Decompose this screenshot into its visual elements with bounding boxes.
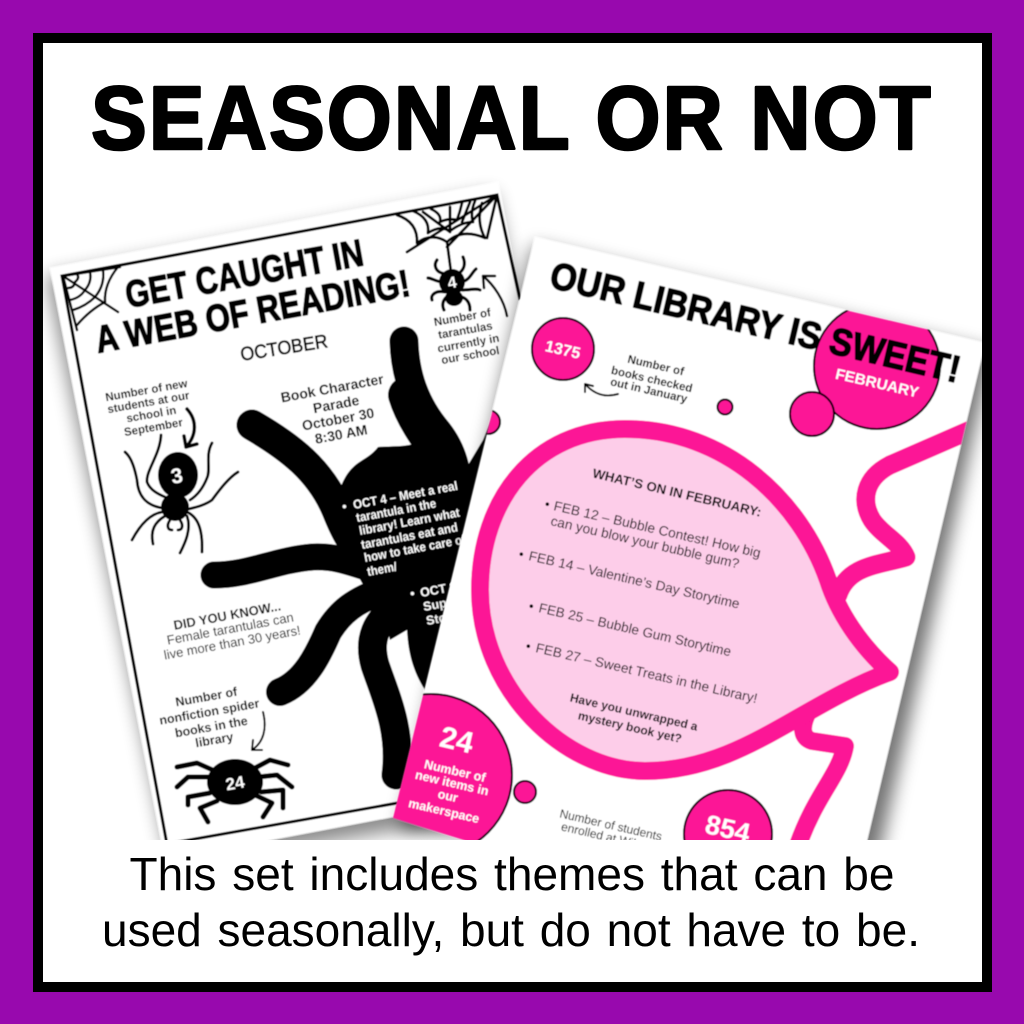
- poster border: [62, 195, 520, 850]
- event: character parade: 8:30 AM: [313, 421, 369, 447]
- nonfiction books caption: books in the: [174, 714, 249, 740]
- caption: This set includes themes that can be: [130, 848, 894, 900]
- icon: giant tarantula silhouette: [214, 341, 540, 775]
- poster sheet: [393, 237, 985, 845]
- tarantula count caption: Number of: [433, 307, 492, 329]
- poster bottom border: [176, 801, 398, 840]
- white event list on spider: OCT 18 –: [419, 576, 475, 600]
- stat 24 makerspace: [407, 721, 490, 826]
- white event list on spider: [342, 480, 463, 626]
- icon: corner web right: [397, 195, 497, 272]
- new students caption: Number of new: [105, 378, 188, 404]
- white event list on spider: how to take care of: [363, 532, 468, 565]
- nonfiction books caption: nonfiction spider: [158, 696, 261, 728]
- left edge bubble: [486, 410, 502, 436]
- poster heading: OUR LIBRARY IS SWEET!: [546, 255, 964, 392]
- bubble event list: •: [517, 546, 526, 562]
- arrow to 1375: [585, 384, 618, 396]
- bubble event list: FEB 27 – Sweet Treats in the Library!: [534, 640, 759, 706]
- white event list on spider: •: [341, 499, 348, 514]
- white event list on spider: them/: [366, 560, 399, 579]
- bubble 1375: [532, 318, 594, 380]
- icon: hanging spider 4: [428, 257, 480, 310]
- bubble event list: [517, 466, 763, 746]
- event: character parade: Parade: [312, 392, 361, 416]
- checkouts caption: books checked: [610, 365, 694, 395]
- bubble event list: •: [527, 598, 536, 614]
- month label: FEBRUARY: [834, 366, 920, 401]
- event: character parade: October 30: [301, 405, 376, 434]
- white event list on spider: tarantula in the: [355, 496, 437, 525]
- nonfiction books caption: library: [194, 730, 234, 750]
- icon: corner web left: [63, 267, 120, 330]
- white event list on spider: OCT 4 – Meet a real: [352, 479, 459, 512]
- arrow to spider 4: [483, 276, 507, 316]
- did you know fact: DID YOU KNOW...: [172, 598, 282, 633]
- bubble 24 makerspace: [350, 694, 512, 856]
- white event list on spider: Super: [422, 594, 460, 614]
- month bubble: [814, 303, 940, 429]
- panel: February bubble gum poster: [390, 235, 982, 840]
- did you know fact: [163, 602, 300, 660]
- poster shadow: [400, 245, 992, 860]
- icon: spider 24: [177, 759, 292, 822]
- stat 24 makerspace: new items in: [414, 768, 490, 798]
- tarantula count caption: tarantulas: [437, 320, 494, 342]
- bubble 854: [684, 790, 772, 878]
- arrow to spider 24: [252, 712, 265, 750]
- nonfiction books caption: Number of: [174, 685, 239, 709]
- stat 24 makerspace: our: [437, 787, 459, 805]
- enrolment caption: Number of students: [558, 807, 663, 844]
- enrolment caption: enrolled at Wilson: [560, 820, 656, 855]
- tarantula count caption: currently in: [437, 333, 500, 355]
- white event list on spider: Story: [425, 608, 459, 628]
- white event list on spider: library! Learn what: [358, 505, 462, 538]
- new students caption: students at our: [107, 390, 191, 416]
- spider number 24: 24: [224, 772, 247, 794]
- spider number 4: 4: [446, 274, 458, 293]
- bubble event list: FEB 25 – Bubble Gum Storytime: [537, 600, 733, 659]
- stat 24 makerspace: makerspace: [407, 796, 481, 826]
- white event list on spider: •: [409, 586, 416, 601]
- stat 24 makerspace: 24: [437, 721, 477, 760]
- wrapper bottom twist: [797, 712, 845, 848]
- small bubble lower: [514, 781, 536, 803]
- month label: OCTOBER: [239, 331, 329, 366]
- icon: spider 3: [125, 435, 238, 553]
- nonfiction books caption: [158, 685, 261, 750]
- arrow to spider 3: [184, 409, 197, 447]
- poster sheet: [50, 182, 540, 860]
- poster heading: GET CAUGHT IN: [122, 232, 367, 317]
- poster heading: [98, 238, 410, 354]
- bubble event list: can you blow your bubble gum?: [549, 513, 741, 571]
- wrapper top twist: [838, 428, 975, 595]
- title: SEASONAL OR NOT: [91, 68, 931, 169]
- small bubble: [718, 400, 732, 414]
- tarantula count caption: [433, 307, 500, 367]
- bubble event list: FEB 14 – Valentine’s Day Storytime: [527, 548, 741, 612]
- poster shadow: [46, 192, 540, 868]
- did you know fact: live more than 30 years!: [163, 623, 302, 663]
- gum bubble: [480, 429, 890, 771]
- new students caption: [105, 378, 191, 439]
- medium bubble: [790, 392, 834, 436]
- tarantula count caption: our school: [440, 345, 500, 367]
- white event list on spider: tarantulas eat and: [360, 520, 459, 552]
- event: character parade: Book Character: [279, 371, 385, 405]
- bubble event list: mystery book yet?: [577, 708, 683, 746]
- stacked poster previews: [46, 182, 992, 878]
- checkouts caption: out in January: [609, 376, 689, 406]
- new students caption: school in: [126, 405, 177, 425]
- stat 854: 854: [702, 809, 753, 849]
- caption: used seasonally, but do not have to be.: [102, 904, 920, 956]
- bubble event list: •: [524, 638, 533, 654]
- stat 24 makerspace: Number of: [423, 757, 488, 785]
- bubble event list: Have you unwrapped a: [569, 691, 699, 734]
- event: character parade: [280, 376, 384, 444]
- bubble event list: •: [543, 496, 552, 512]
- checkouts caption: Number of: [626, 354, 685, 378]
- new students caption: September: [123, 417, 184, 439]
- did you know fact: Female tarantulas can: [166, 609, 295, 648]
- caption: [102, 848, 920, 956]
- bubble event list: FEB 12 – Bubble Contest! How big: [552, 498, 762, 561]
- heading second line: A WEB OF READING!: [92, 263, 413, 362]
- spider number 3: 3: [169, 464, 185, 489]
- checkouts caption: [609, 354, 694, 406]
- panel: October spider poster: [46, 182, 540, 868]
- bubble event list: WHAT’S ON IN FEBRUARY:: [591, 466, 763, 520]
- stat 1375: 1375: [543, 338, 582, 363]
